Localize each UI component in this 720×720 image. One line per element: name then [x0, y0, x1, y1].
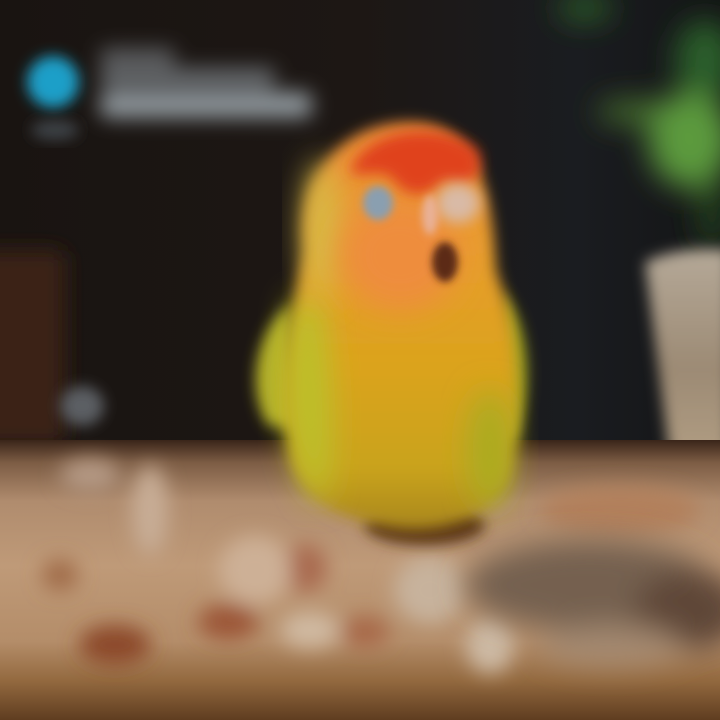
- orange cheeks: [340, 200, 460, 310]
- table surface: [0, 440, 720, 720]
- background wall: [0, 0, 720, 480]
- right wing: [490, 290, 527, 440]
- pot: beige planter, right: [645, 249, 720, 490]
- left wing: [256, 305, 300, 430]
- icon: blue circle: [27, 56, 79, 108]
- logo shadow: [31, 120, 79, 140]
- left eye: [363, 186, 393, 220]
- body: [285, 122, 517, 529]
- pot: brown container, left: [0, 250, 65, 445]
- dark seed pile, right: [465, 540, 720, 665]
- scattered seeds: warm blurred patches: [42, 459, 700, 673]
- red crown: [350, 131, 480, 194]
- logo: blurred brand mark: [27, 48, 312, 140]
- logo text block: [100, 48, 312, 118]
- bird: lovebird: [256, 122, 527, 545]
- plant: green leaves, top right: [557, 0, 720, 249]
- beak: [432, 242, 458, 282]
- left green flank: [286, 300, 332, 505]
- small grey highlight, left: [60, 386, 104, 426]
- beak patch: [422, 195, 438, 235]
- bird shadow: [365, 505, 485, 545]
- left yellow head side: [304, 160, 340, 300]
- right eye patch: [436, 183, 480, 223]
- lower right green: [468, 390, 512, 510]
